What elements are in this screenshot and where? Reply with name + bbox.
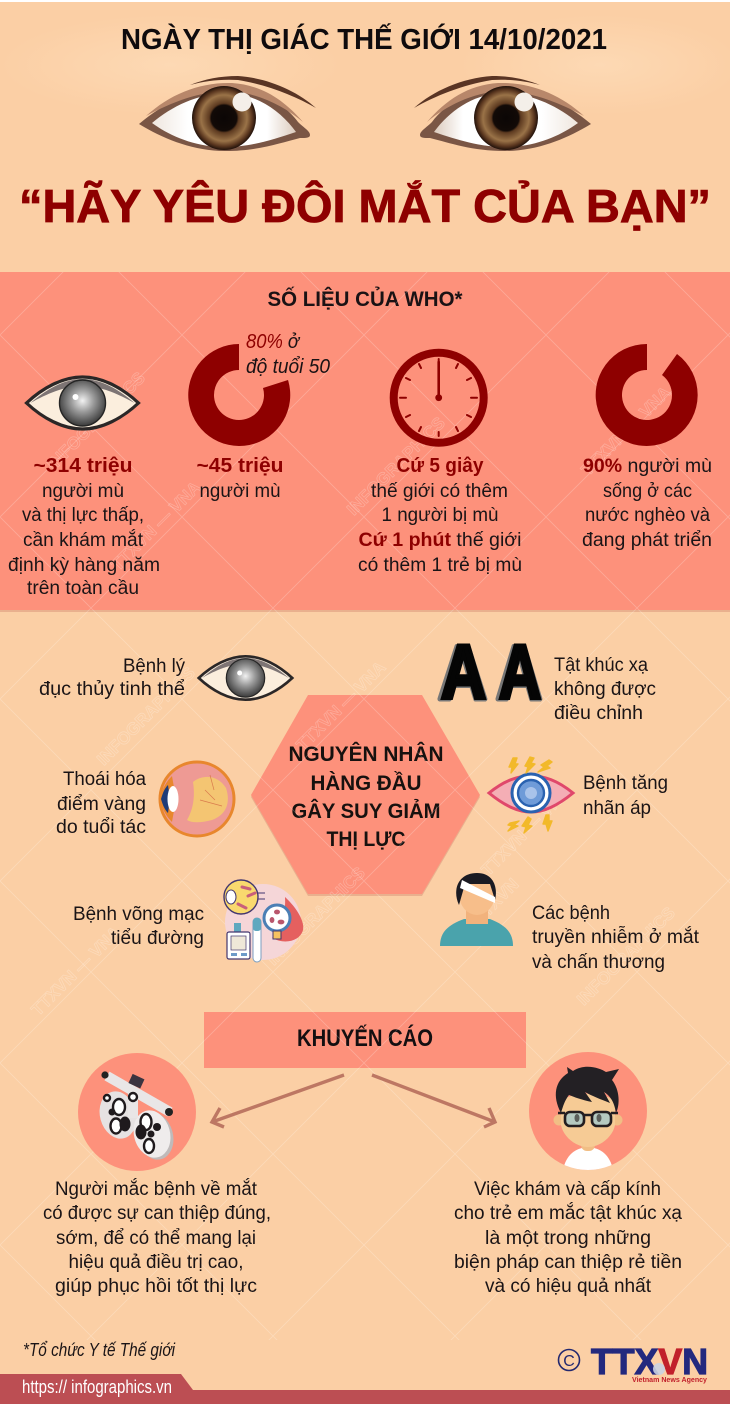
stat text: sống ở các	[603, 481, 692, 502]
watermark lattice and stamps: INFOGRAPHICS	[573, 903, 679, 1009]
title: NGÀY THỊ GIÁC THẾ GIỚI 14/10/2021	[121, 22, 607, 56]
watermark lattice and stamps: INFOGRAPHICS	[343, 413, 449, 519]
recommendation text left: có được sự can thiệp đúng,	[43, 1203, 271, 1224]
watermark lattice and stamps: TTXVN — VNA	[108, 478, 205, 575]
recommendation left	[43, 1053, 271, 1297]
donut annotation: độ tuổi 50	[246, 356, 330, 378]
glaucoma label: nhãn áp	[583, 798, 651, 819]
icon: red eye with bolts	[489, 757, 573, 833]
macular label: điểm vàng	[57, 794, 146, 815]
trauma label: và chấn thương	[532, 952, 665, 973]
icon: phoropter	[78, 1053, 196, 1171]
donut annotation: 80% ở	[246, 331, 301, 353]
watermark lattice and stamps: TTXVN — VNA	[578, 383, 675, 480]
hexagon: leading causes	[251, 695, 480, 896]
heading: KHUYẾN CÁO	[297, 1024, 433, 1052]
stat text: 90% người mù	[583, 456, 712, 477]
cataract label: Bệnh lý	[123, 656, 185, 677]
cataract label: đục thủy tinh thể	[39, 679, 185, 700]
icon: diabetes items	[224, 880, 303, 962]
retinopathy label: Bệnh võng mạc	[73, 904, 204, 925]
stat text: trên toàn cầu	[27, 578, 139, 599]
retinopathy label: tiểu đường	[111, 928, 204, 949]
watermark lattice and stamps: TTXVN — VNA	[28, 923, 125, 1020]
recommendation text right: Việc khám và cấp kính	[474, 1179, 661, 1200]
donut annotation	[246, 331, 330, 378]
logo: TTXVN: Vietnam News Agency	[632, 1375, 708, 1384]
logo: TTXVN: TTXVN	[591, 1341, 708, 1382]
chart: donut 80%	[188, 344, 290, 446]
panel: KHUYEN CAO heading box	[204, 1012, 526, 1068]
watermark lattice and stamps: TTXVN — VNA	[293, 658, 390, 755]
icon: left big eye	[139, 76, 316, 151]
arrow: to right recommendation	[372, 1075, 495, 1127]
stat text	[8, 454, 160, 599]
hexagon text: THỊ LỰC	[326, 827, 406, 851]
trauma label	[532, 903, 700, 973]
trauma label: Các bệnh	[532, 903, 610, 924]
refractive label: Tật khúc xạ	[554, 655, 648, 676]
stat 4: 90% donut and text	[582, 344, 712, 551]
panel: WHO statistics	[0, 272, 730, 612]
stat text: Cứ 1 phút thế giới	[358, 530, 522, 551]
recommendation text left: Người mắc bệnh về mắt	[55, 1178, 258, 1200]
stat 3: clock and text	[358, 353, 522, 576]
hexagon text: HÀNG ĐẦU	[310, 770, 422, 795]
arrow: to left recommendation	[212, 1075, 344, 1127]
stat text: Cứ 5 giây	[396, 454, 484, 477]
logo: TTXVN: C	[563, 1353, 575, 1370]
recommendation text left	[43, 1178, 271, 1297]
icon: cataract eye	[199, 656, 292, 700]
glaucoma label	[583, 773, 668, 819]
watermark lattice and stamps: INFOGRAPHICS	[93, 663, 199, 769]
stat text: ~45 triệu	[196, 454, 284, 477]
cause: macular degeneration	[56, 762, 234, 838]
recommendation text right	[454, 1179, 682, 1297]
macular label: Thoái hóa	[63, 769, 146, 790]
refractive label	[554, 655, 656, 724]
icon: boy with glasses	[529, 1052, 647, 1170]
recommendation text left: sớm, để có thể mang lại	[56, 1228, 256, 1249]
glaucoma label: Bệnh tăng	[583, 773, 668, 794]
recommendation right	[454, 1052, 682, 1297]
stat 2: 80% donut and text	[188, 331, 330, 502]
cause: glaucoma	[489, 757, 668, 833]
stat text: người mù	[200, 481, 280, 502]
recommendation text right: biện pháp can thiệp rẻ tiền	[454, 1252, 682, 1273]
stat text: ~314 triệu	[34, 454, 132, 477]
cause: diabetic retinopathy	[73, 880, 303, 962]
watermark lattice and stamps: INFOGRAPHICS	[43, 368, 149, 474]
trauma label: truyền nhiễm ở mắt	[532, 926, 700, 948]
icon: grey eye	[26, 377, 138, 429]
footnote: *Tổ chức Y tế Thế giới	[23, 1340, 176, 1360]
icon: right big eye	[414, 76, 591, 151]
cataract label	[39, 656, 185, 700]
stat text: người mù	[42, 481, 124, 502]
footer bar with URL	[0, 1374, 730, 1404]
icon: bandaged person	[440, 873, 513, 946]
watermark lattice and stamps: TTXVN	[470, 875, 523, 928]
footer bar with URL: https:// infographics.vn	[22, 1377, 172, 1397]
cause: cataract	[39, 656, 292, 700]
hexagon text	[288, 741, 444, 851]
cause: uncorrected refractive error	[438, 630, 656, 724]
stat text: và thị lực thấp,	[22, 505, 144, 526]
hexagon text: NGUYÊN NHÂN	[288, 741, 444, 766]
recommendation text right: là một trong những	[485, 1228, 651, 1249]
icon: clock	[394, 353, 484, 443]
stat text: nước nghèo và	[585, 505, 710, 526]
chart: donut 90%	[596, 344, 698, 446]
panel heading: SỐ LIỆU CỦA WHO*	[268, 287, 463, 311]
macular label: do tuổi tác	[56, 817, 146, 838]
retinopathy label	[73, 904, 204, 949]
headline slogan: “HÃY YÊU ĐÔI MẮT CỦA BẠN”	[19, 180, 711, 232]
icon: blurred AA letters: A	[499, 630, 541, 715]
stat text: thế giới có thêm	[371, 481, 508, 502]
macular label	[56, 769, 146, 838]
hexagon text: GÂY SUY GIẢM	[292, 798, 440, 823]
stat text	[196, 454, 284, 502]
icon: eye cross-section	[160, 762, 234, 836]
stat text	[582, 456, 712, 551]
stat text	[358, 454, 522, 576]
recommendation text left: giúp phục hồi tốt thị lực	[55, 1276, 257, 1297]
watermark lattice and stamps: TTXVN — VNA	[478, 783, 575, 880]
icon: blurred AA letters	[438, 630, 542, 716]
stat text: có thêm 1 trẻ bị mù	[358, 555, 522, 576]
watermark lattice and stamps: INFOGRAPHICS	[263, 863, 369, 969]
stat text: định kỳ hàng năm	[8, 555, 160, 576]
watermark lattice and stamps	[0, 272, 730, 1340]
stat text: 1 người bị mù	[382, 505, 498, 526]
stat 1: cataract eye and text	[8, 377, 160, 599]
icon: blurred AA letters: A	[438, 631, 487, 716]
refractive label: điều chỉnh	[554, 703, 643, 724]
stat text: đang phát triển	[582, 530, 712, 551]
icon: blurred AA letters: A	[441, 630, 486, 715]
recommendation text right: và có hiệu quả nhất	[485, 1276, 652, 1297]
icon: blurred AA letters: A	[496, 631, 542, 716]
stat text: cần khám mắt	[23, 529, 144, 551]
recommendation text left: hiệu quả điều trị cao,	[68, 1252, 244, 1273]
refractive label: không được	[554, 679, 656, 700]
recommendation text right: cho trẻ em mắc tật khúc xạ	[454, 1202, 682, 1224]
cause: infection and trauma	[440, 873, 700, 973]
